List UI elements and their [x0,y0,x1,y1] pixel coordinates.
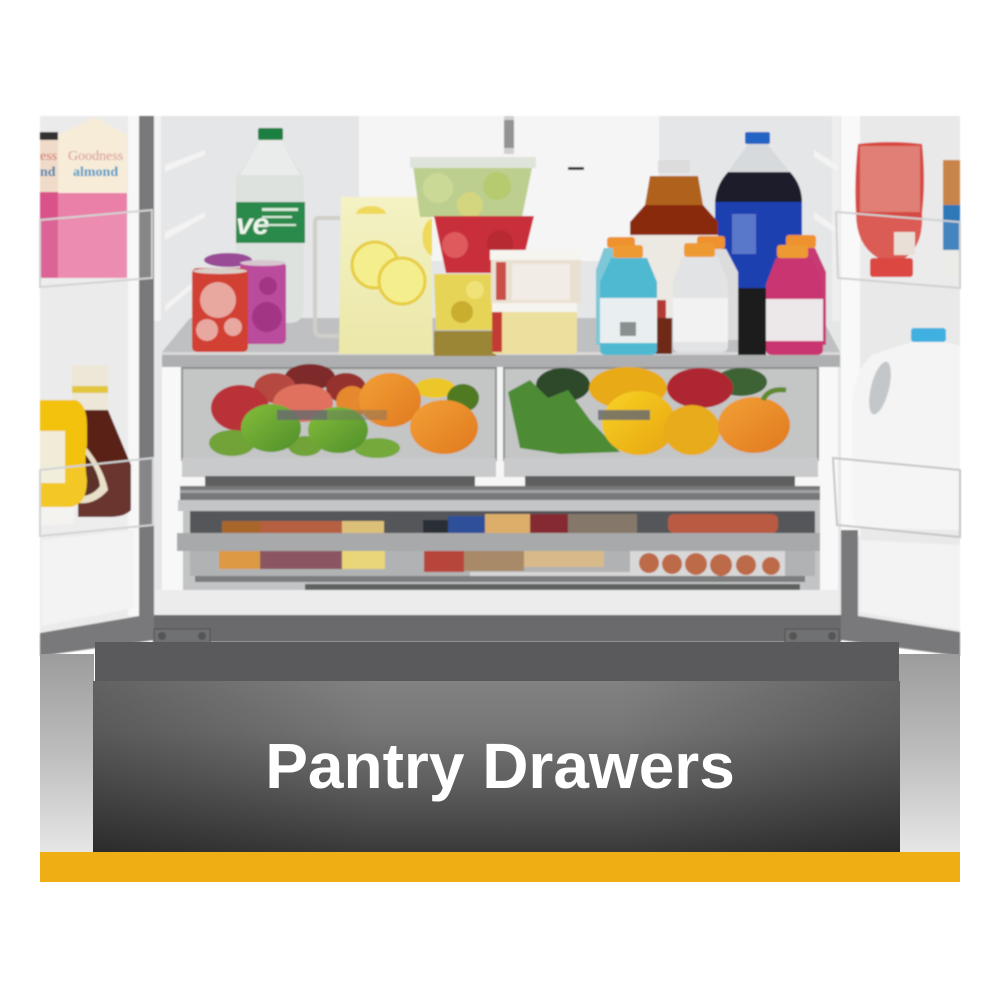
mustard bottle [40,400,87,525]
panel: fridge interior [153,116,841,616]
hinges [154,629,839,643]
freezer top band [95,642,899,681]
drawer front rails [178,458,820,511]
syrup bottle [72,365,131,517]
panel: left door [40,116,154,656]
food containers [490,250,581,354]
milk carton: ess [40,149,57,164]
pantry drawer contents [183,511,820,590]
pantry drawer handle [177,533,820,551]
cola bottle [715,132,802,355]
clear drink [673,243,728,352]
sports drinks [596,235,826,355]
soda bottle: green label [236,128,305,323]
ketchup bottle [855,142,924,277]
iced tea bottle [630,160,718,354]
fridge floor [153,590,841,642]
upper door bin [40,210,152,287]
blue drink [600,245,657,355]
sausages [630,514,785,576]
milk carton [40,117,127,278]
shelf [162,318,840,367]
panel: right door [833,116,960,656]
soda bottle: green label: ve [236,208,269,241]
lemonade pitcher [315,197,433,354]
freezer drawer front [93,681,900,852]
fruit containers [410,157,536,356]
milk carton: Goodness [68,149,123,164]
back row bottles [596,235,826,345]
milk jug [852,328,960,530]
soda cans [192,253,286,352]
packaged foods centre [423,514,640,576]
freezer base sides [40,654,960,852]
lower door bin [833,458,960,537]
milk carton: nd [40,165,56,180]
lower door bin [40,458,153,536]
box on door shelf [943,160,960,276]
heading: Pantry Drawers: Pantry Drawers [265,730,735,802]
yellow footer band [40,852,960,882]
upper door bin [836,212,960,288]
drawer: vegetables [504,367,818,460]
drawer: fruits [182,364,496,460]
side column posts [162,367,838,592]
packaged foods left [219,521,385,569]
milk carton: almond [73,165,118,180]
pink drink [766,245,823,355]
